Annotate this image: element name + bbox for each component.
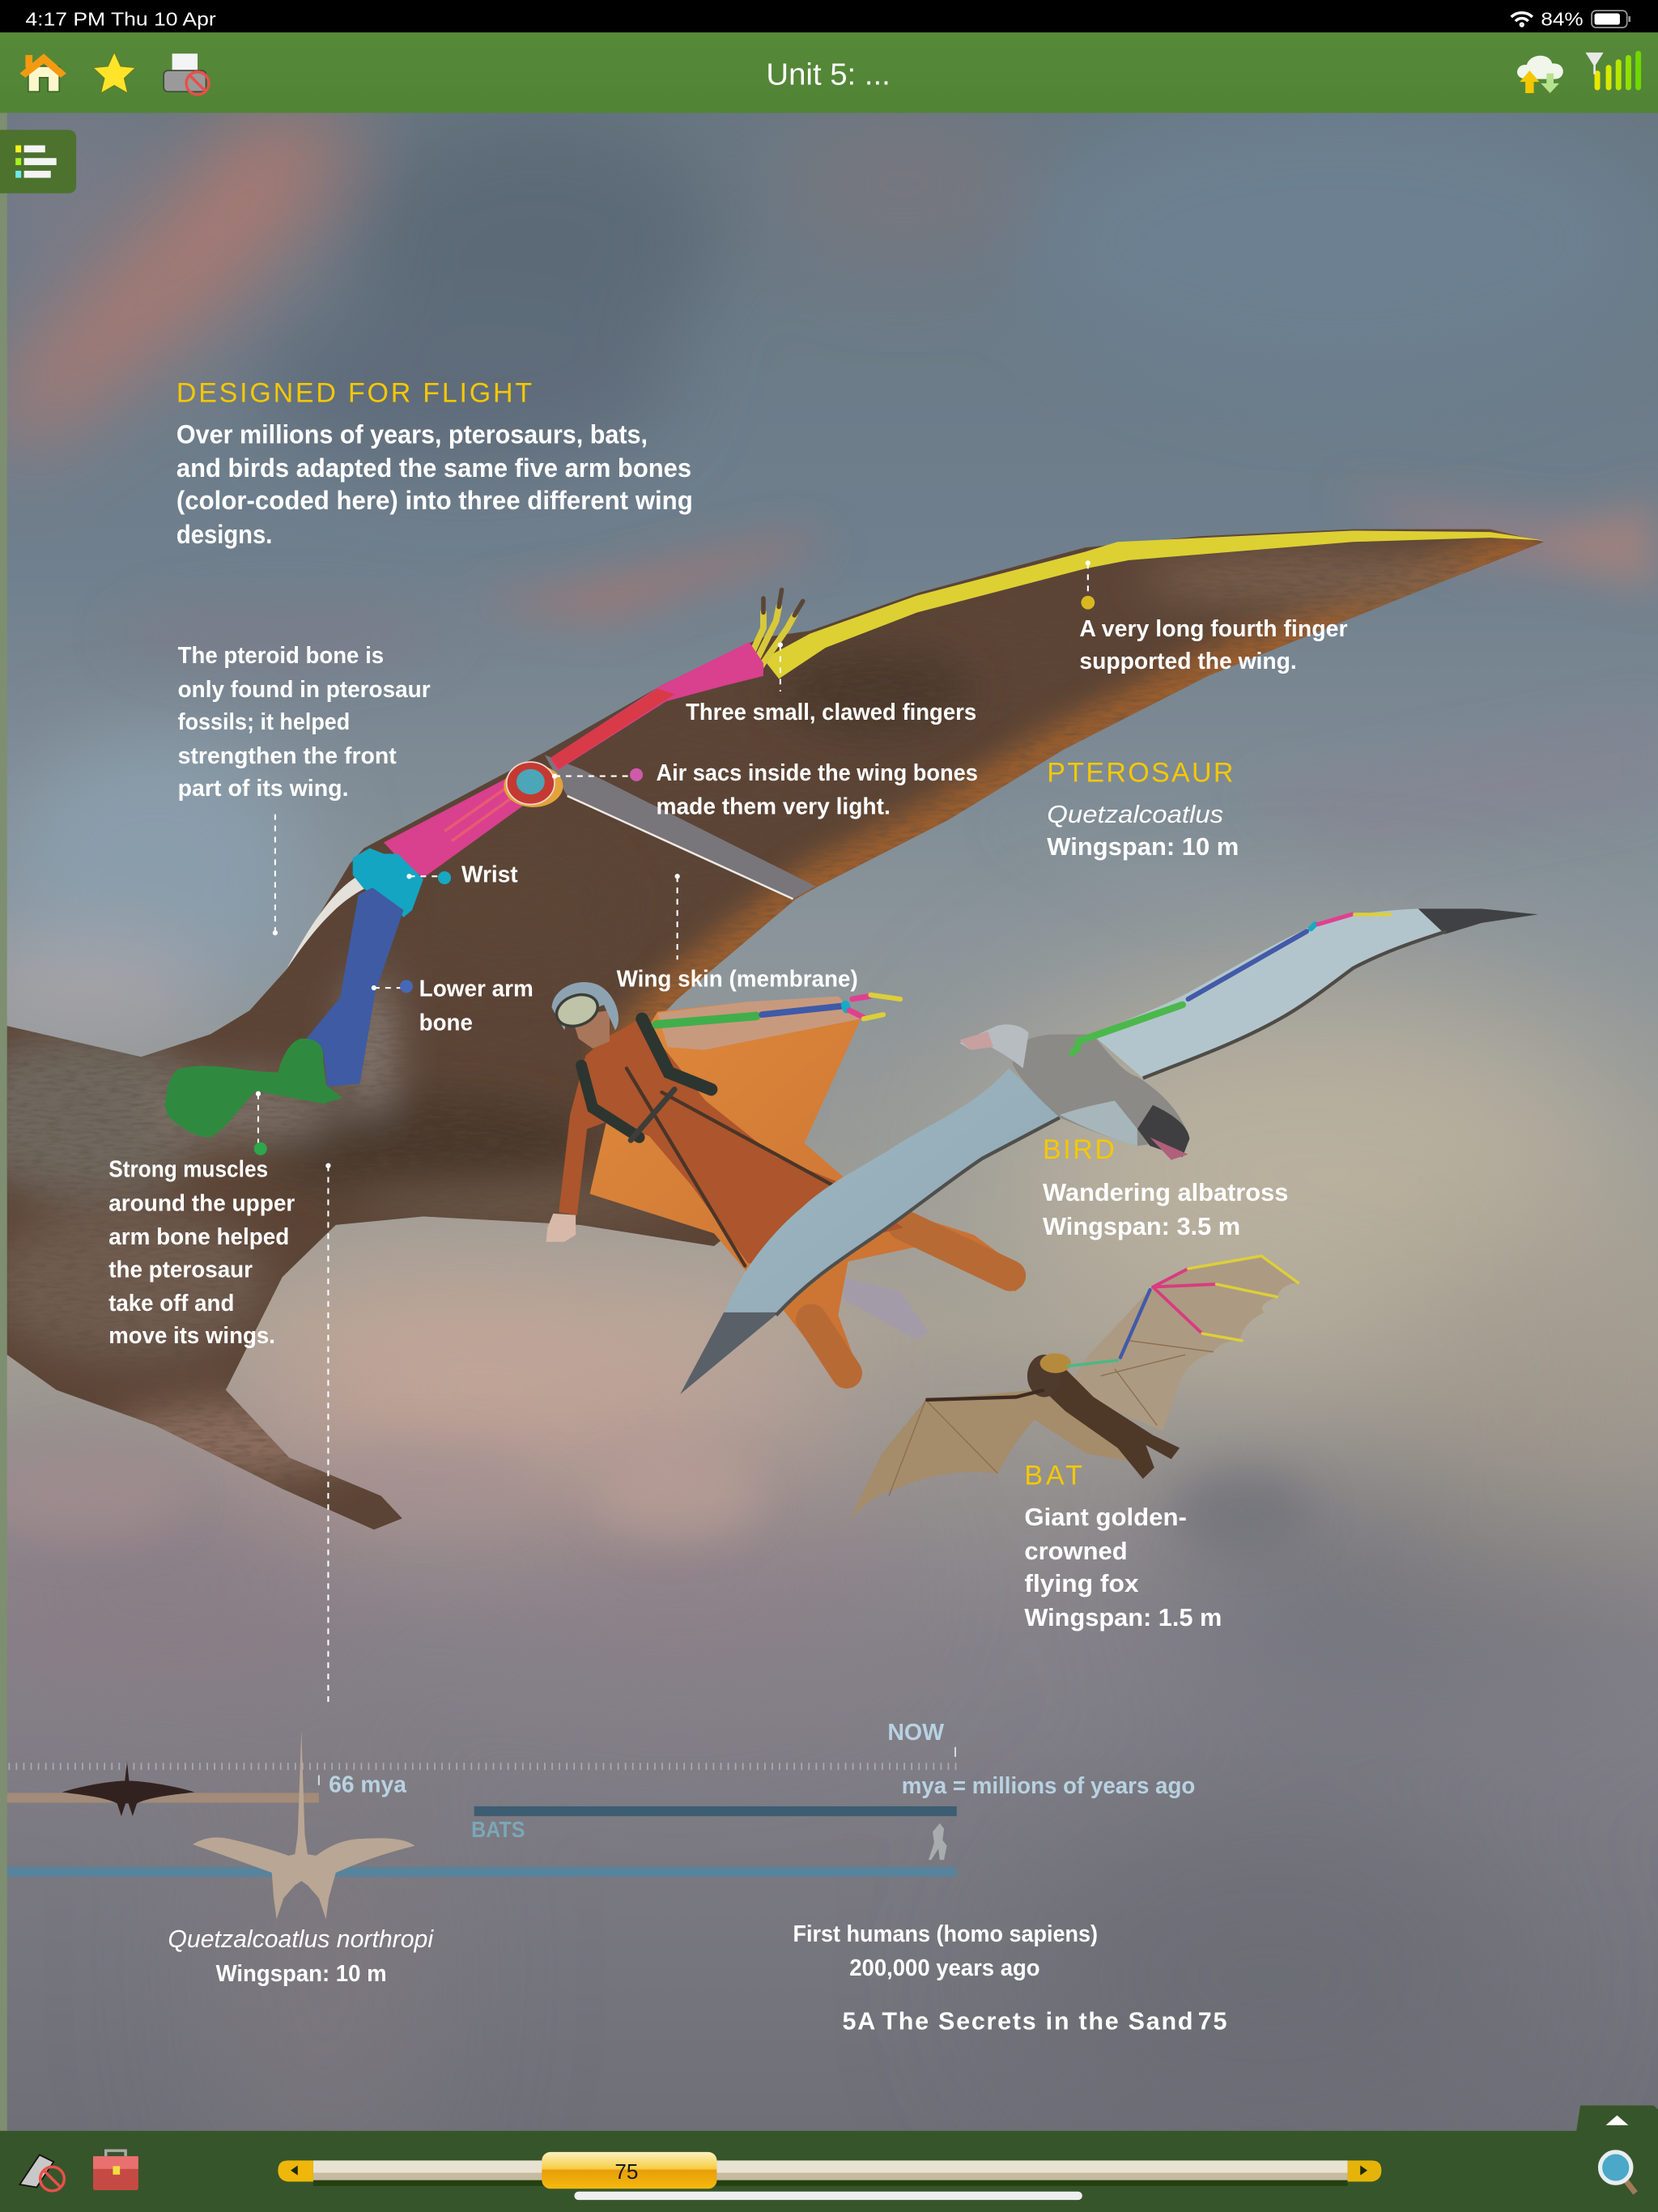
hand: [546, 1214, 576, 1242]
callout: pteroid bone: only found in pterosaur: [178, 677, 431, 703]
callout: strong muscles: move its wings.: [108, 1323, 275, 1349]
right wing membrane: [1065, 1256, 1299, 1431]
callout: strong muscles: the pterosaur: [108, 1257, 253, 1283]
callout: strong muscles: around the upper: [108, 1190, 295, 1216]
outer metacarpal bone: [551, 642, 763, 771]
label: now: NOW: [887, 1720, 945, 1746]
birds time bar: [7, 1867, 957, 1877]
icon: list: [15, 146, 57, 178]
battery icon: [1592, 11, 1630, 28]
icon: favourite star: [93, 52, 135, 93]
caption: first humans: First humans (homo sapiens): [793, 1921, 1098, 1947]
caption: Quetzalcoatlus northropi: Quetzalcoatlus northropi: [168, 1925, 434, 1953]
label: bats: BATS: [471, 1817, 525, 1842]
intro text: [176, 419, 693, 549]
pteroid bone: [287, 870, 376, 969]
icon: cloud sync: [1517, 56, 1563, 93]
label: bat: Wingspan: 1.5 m: [1024, 1604, 1222, 1631]
callout: strong muscles: arm bone helped: [108, 1224, 289, 1250]
illustration: pterosaur: [0, 522, 1552, 1538]
callout: fourth finger: A very long fourth finger: [1079, 616, 1348, 642]
caption: first humans: [793, 1921, 1098, 1981]
left wing membrane: [848, 1390, 1129, 1523]
upper arm bone: [165, 1039, 343, 1138]
wing bones: [1073, 914, 1390, 1053]
left page edge: [0, 113, 7, 2131]
wing strut band: [545, 755, 815, 899]
label: bat: BAT: [1024, 1461, 1082, 1491]
icon: toolbox: [93, 2150, 138, 2190]
heading: designed for flight: DESIGNED FOR FLIGHT: [176, 378, 532, 409]
label: bat: Giant golden-: [1024, 1504, 1187, 1531]
label: pterosaur: Quetzalcoatlus: [1047, 801, 1223, 828]
callout: pteroid bone: part of its wing.: [178, 776, 349, 802]
slider track: [313, 2160, 1348, 2180]
caption: Quetzalcoatlus northropi: [168, 1925, 434, 1987]
label: mya definition: mya = millions of years ago: [902, 1773, 1195, 1799]
callout: fourth finger: [1079, 616, 1348, 674]
slider right arrow: [1348, 2160, 1381, 2182]
label: bird: [1043, 1134, 1288, 1240]
arm bones: [656, 995, 900, 1024]
icon: eraser disabled: [19, 2155, 64, 2191]
illustration: giant golden-crowned flying fox: [848, 1256, 1299, 1523]
pterosaur wing and body: [7, 530, 1544, 1529]
intro text: and birds adapted the same five arm bones: [176, 453, 691, 483]
wrist bones: [353, 848, 423, 917]
caption: Quetzalcoatlus northropi: Wingspan: 10 m: [216, 1961, 387, 1987]
wingsuit: [590, 1002, 1026, 1389]
page footer: 5A: [843, 2007, 877, 2035]
unit title: Unit 5: ...: [766, 57, 891, 92]
body: [1035, 1368, 1180, 1479]
label: 66 mya: 66 mya: [329, 1772, 407, 1797]
top toolbar: [0, 32, 1658, 113]
harness straps: [581, 1019, 838, 1266]
pale hand: [844, 1277, 929, 1339]
helmet: [552, 982, 619, 1030]
suit legs: [811, 1225, 1010, 1373]
label: bird: Wandering albatross: [1043, 1179, 1288, 1206]
slider thumb: [542, 2152, 716, 2189]
callout: wrist: Wrist: [461, 861, 518, 887]
menu button: [0, 130, 76, 194]
page slider: [278, 2152, 1381, 2189]
callout: clawed fingers: Three small, clawed fingers: [686, 700, 976, 725]
callout: pteroid bone: strengthen the front: [178, 743, 397, 769]
wing veins: [889, 1341, 1214, 1495]
pneumatic bone cross-section: [504, 762, 563, 807]
label: pterosaur: [1047, 758, 1239, 861]
silhouette: human: [929, 1823, 947, 1860]
bats time bar: [474, 1806, 957, 1816]
pterosaurs time bar: [7, 1793, 319, 1803]
forearm: [925, 1390, 1044, 1400]
timeline ticks: [8, 1764, 957, 1768]
lower arm bone: [306, 887, 403, 1087]
left wing: [724, 1068, 1060, 1315]
intro text: Over millions of years, pterosaurs, bats,: [176, 419, 648, 449]
slider left arrow: [278, 2160, 313, 2182]
callout: strong muscles: Strong muscles: [108, 1157, 268, 1183]
illustration: human in wingsuit: [546, 982, 1026, 1389]
label: pterosaur: Wingspan: 10 m: [1047, 833, 1239, 861]
home indicator: [574, 2192, 1082, 2200]
right wing tip: [1418, 908, 1538, 934]
page footer: The Secrets in the Sand: [882, 2007, 1194, 2035]
torso: [559, 1019, 903, 1270]
callout: wing skin: Wing skin (membrane): [617, 966, 858, 992]
callout: fourth finger: supported the wing.: [1079, 649, 1297, 674]
label: bird: BIRD: [1043, 1134, 1115, 1165]
icon: printer disabled: [164, 53, 209, 95]
callout: lower arm bone: Lower arm: [419, 976, 534, 1002]
intro text: designs.: [176, 520, 272, 549]
label: bat: crowned: [1024, 1538, 1128, 1565]
slider thumb: 75: [614, 2159, 638, 2184]
label: pterosaur: PTEROSAUR: [1047, 758, 1233, 789]
status bar: 84%: [1541, 8, 1584, 29]
silhouette: small pterosaur: [62, 1761, 195, 1816]
inner metacarpal bone: [384, 777, 525, 878]
silhouette: Quetzalcoatlus: [193, 1730, 414, 1919]
left wing tip: [680, 1312, 779, 1394]
timeline chart: [7, 1720, 1195, 1919]
icon: magnifier: [1601, 2152, 1635, 2193]
fourth finger bone: [763, 530, 1544, 678]
intro text: (color-coded here) into three different wing: [176, 486, 693, 515]
wifi icon: [1511, 13, 1533, 26]
body: [1013, 1035, 1189, 1146]
face: [572, 1010, 610, 1049]
now tick: [954, 1747, 956, 1757]
feet: [1150, 1138, 1188, 1160]
callout: pteroid bone: The pteroid bone is: [178, 643, 384, 669]
label: bat: flying fox: [1024, 1570, 1139, 1597]
three clawed fingers: [750, 590, 803, 669]
callout: pteroid bone: fossils; it helped: [178, 709, 350, 735]
callout: lower arm bone: bone: [419, 1010, 473, 1036]
icon: home: [19, 53, 66, 91]
icon: signal bars: [1588, 53, 1639, 87]
page footer: 75: [1198, 2007, 1228, 2035]
golden crown: [1040, 1353, 1071, 1373]
label: bat: [1024, 1461, 1222, 1631]
right wing: [1092, 908, 1468, 1078]
head: [959, 1024, 1029, 1068]
bottom toolbar: [0, 2105, 1658, 2212]
tab: expand toolbar: [1576, 2105, 1658, 2133]
illustration: wandering albatross: [680, 908, 1538, 1394]
callout: pteroid bone: [178, 643, 431, 802]
status bar: 4:17 PM Thu 10 Apr: [25, 8, 216, 29]
callout: lower arm bone: [419, 976, 534, 1036]
leader lines and markers: [254, 560, 1095, 1704]
head: [1027, 1355, 1061, 1397]
arm: [657, 996, 861, 1050]
callout: air sacs: made them very light.: [656, 794, 891, 820]
status bar: [0, 0, 1658, 32]
label: bird: Wingspan: 3.5 m: [1043, 1213, 1240, 1240]
66 mya tick: [318, 1776, 320, 1785]
goggles: [552, 989, 602, 1032]
caption: first humans: 200,000 years ago: [849, 1955, 1040, 1981]
callout: strong muscles: take off and: [108, 1291, 234, 1317]
callout: air sacs: [656, 760, 978, 820]
body and wing shading: [0, 522, 1552, 1538]
wing bones: [1068, 1256, 1299, 1366]
callout: strong muscles: [108, 1157, 295, 1349]
callout: air sacs: Air sacs inside the wing bones: [656, 760, 978, 786]
